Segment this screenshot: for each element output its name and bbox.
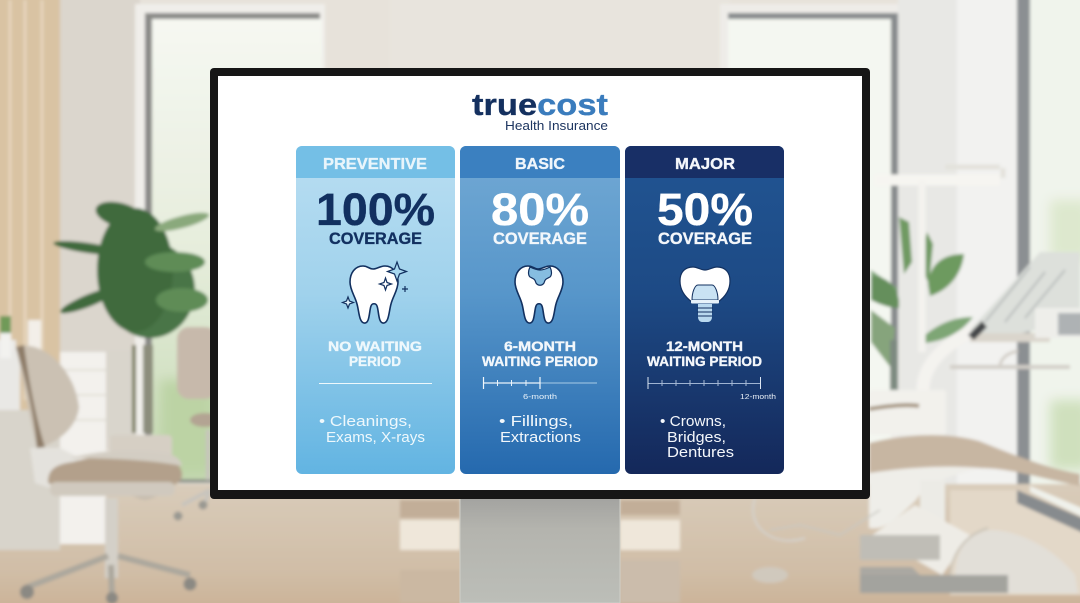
panel: basic: 6-MONTH <box>504 339 576 354</box>
panel: preventive <box>296 146 455 474</box>
icon: tooth with filling <box>515 266 563 323</box>
chair left <box>16 346 79 448</box>
icon: dental implant crown <box>680 267 730 322</box>
monitor with screen content <box>210 68 870 499</box>
panel: major: Dentures <box>667 444 734 461</box>
panel: preventive: PREVENTIVE <box>323 156 427 173</box>
monitor stand <box>460 498 620 603</box>
timeline: 12-month: 12-month <box>740 392 776 401</box>
icon: sparkling tooth <box>342 262 408 323</box>
panel: major: WAITING PERIOD <box>647 354 762 369</box>
floor reflections <box>400 520 460 550</box>
panel: basic: • Fillings, <box>499 413 573 430</box>
plant left <box>53 197 211 338</box>
dental chair and equipment <box>875 174 1000 186</box>
timeline: 6-month <box>484 377 597 401</box>
logo: truecost Health Insurance: truecost <box>472 87 608 122</box>
panel: preventive: 100% <box>316 184 435 235</box>
panel: preventive: COVERAGE <box>329 230 422 248</box>
panel: major: • Crowns, <box>660 413 726 430</box>
timeline: 6-month: 6-month <box>523 392 557 401</box>
panel: preventive: NO WAITING <box>328 339 422 354</box>
panel: basic: 80% <box>491 184 589 235</box>
panel: preventive: Exams, X-rays <box>326 429 425 446</box>
cabinets left <box>0 410 60 550</box>
panel: basic: BASIC <box>515 156 565 173</box>
panel: basic: Extractions <box>500 429 581 446</box>
panel: major: 50% <box>657 184 753 235</box>
panel: preventive: PERIOD <box>349 354 401 369</box>
monitor bezel <box>210 68 870 499</box>
white screen <box>218 76 862 490</box>
panel: preventive: • Cleanings, <box>319 413 412 430</box>
panel: major: Bridges, <box>667 429 726 446</box>
panel: major: COVERAGE <box>658 230 752 248</box>
panel: basic <box>460 146 620 474</box>
timeline: 12-month <box>648 377 776 401</box>
logo: truecost Health Insurance: Health Insurance <box>505 119 608 133</box>
panel: basic: COVERAGE <box>493 230 587 248</box>
plant right <box>871 217 973 390</box>
panel: major <box>625 146 784 474</box>
panel: major: MAJOR <box>675 156 735 173</box>
panel: major: 12-MONTH <box>666 339 743 354</box>
panel: basic: WAITING PERIOD <box>482 354 598 369</box>
second chair behind <box>177 327 217 399</box>
